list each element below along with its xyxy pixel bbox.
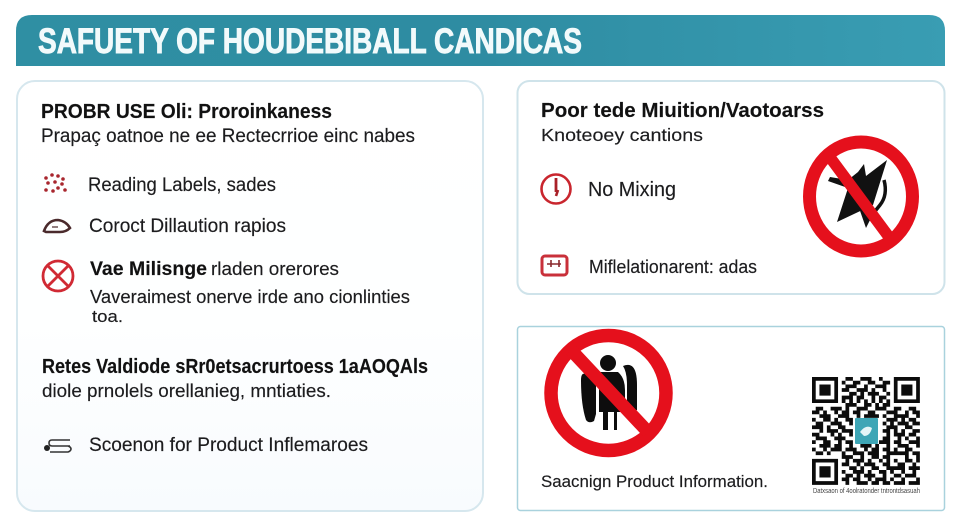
panel: storage [518, 326, 944, 510]
text: no mixing: No Mixing [588, 179, 676, 201]
icon: scan [44, 440, 71, 452]
text: misuse: Vae Milisnge [90, 259, 207, 280]
text: mixing detail: Miflelationarent: adas [589, 257, 757, 277]
text: scanning product information: Saacnign Product Information. [541, 473, 768, 491]
QR caption: Datxsaon of 4oolratonder tntrontdsasuah [813, 488, 920, 495]
icon: dilution [44, 220, 70, 232]
icon: alert clock [542, 174, 570, 204]
text: misuse detail [90, 287, 410, 326]
text: misuse: rladen orerores [211, 259, 339, 279]
heading: proper use: PROBR USE Oli: Proroinkaness [41, 101, 332, 123]
heading: poor use: Poor tede Miuition/Vaotoarss [541, 100, 824, 122]
title banner [16, 15, 945, 66]
subheading: proper use: Prapaç oatnoe ne ee Rectecrrioe einc nabes [41, 126, 415, 147]
subheading: retain: diole prnolels orellanieg, mntiaties. [42, 381, 331, 401]
panel: proper use [17, 81, 483, 511]
icon: prohibited person [551, 336, 666, 450]
text: reading labels: Reading Labels, sades [88, 175, 276, 196]
title: SAFUETY OF HOUDEBIBALL CANDICAS [38, 22, 582, 61]
text: misuse [90, 259, 339, 280]
heading: retain: Retes Valdiode sRr0etsacrurtoess 1aAOQAls [42, 356, 428, 378]
icon: reading labels [44, 173, 67, 193]
icon: measure [542, 256, 567, 275]
text: dilution: Coroct Dillaution rapios [89, 216, 286, 237]
QR centre logo [855, 418, 878, 444]
icon: no misuse [43, 261, 73, 291]
QR code [812, 379, 920, 495]
text: scan: Scoenon for Product Inflemaroes [89, 435, 368, 456]
subheading: poor use: Knoteoey cantions [541, 125, 703, 145]
text: misuse detail: toa. [92, 307, 123, 326]
text: misuse detail: Vaveraimest onerve irde ano cionlinties [90, 287, 410, 307]
panel: poor use [518, 81, 944, 294]
icon: prohibited chemical [810, 142, 912, 251]
